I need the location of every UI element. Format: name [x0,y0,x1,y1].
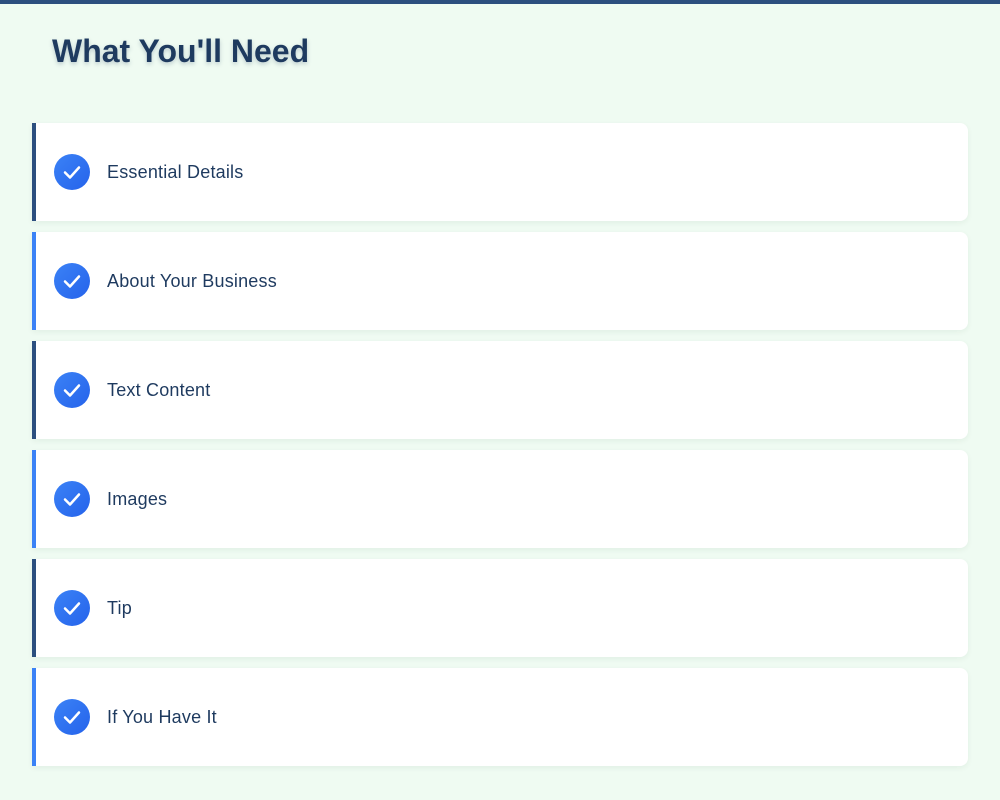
icon: check [54,699,90,735]
card: Tip: Tip [107,598,132,618]
icon: check [54,263,90,299]
card: Images: Images [107,489,167,509]
icon: check [54,372,90,408]
card: Text Content: Text Content [107,380,210,400]
icon: check [54,590,90,626]
card: Essential Details: Essential Details [107,162,243,182]
icon: check [54,154,90,190]
card: Essential Details [32,123,968,221]
card: Tip [32,559,968,657]
card: If You Have It [32,668,968,766]
card: About Your Business [32,232,968,330]
icon: check [54,481,90,517]
card: If You Have It: If You Have It [107,707,217,727]
card: About Your Business: About Your Business [107,271,277,291]
card: Images [32,450,968,548]
card: Text Content [32,341,968,439]
title: What You'll Need [52,33,309,69]
